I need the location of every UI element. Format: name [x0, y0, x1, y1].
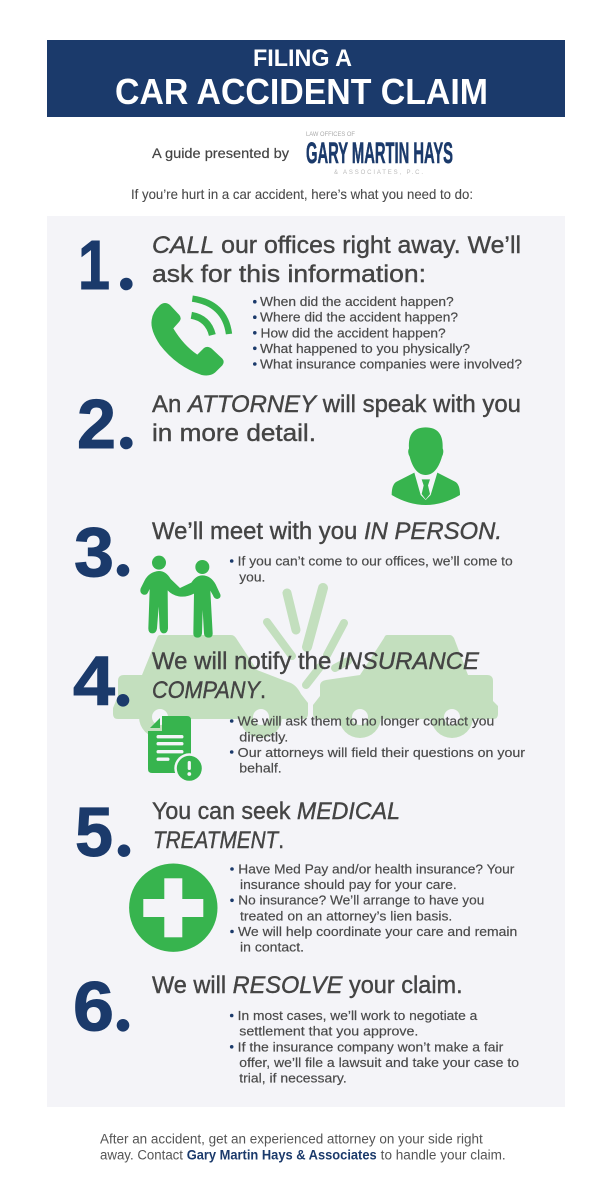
icon: medical cross [129, 864, 218, 952]
illustration: car crash watermark [113, 588, 498, 738]
footer call to action [100, 1131, 506, 1162]
text: GARY MARTIN HAYS [306, 137, 453, 170]
heading: resolve: We will RESOLVE your claim. [152, 972, 463, 999]
logo: Gary Martin Hays: & ASSOCIATES, P.C. [334, 170, 423, 176]
guide presented by line: A guide presented by [152, 145, 289, 161]
list: insurance: behalf. [239, 761, 282, 776]
list: insurance [230, 714, 526, 776]
footer call to action: to handle your claim. [381, 1147, 506, 1162]
list: insurance: directly. [239, 729, 288, 744]
list: medical: No insurance? We’ll arrange to have you [238, 893, 484, 908]
heading: attorney [152, 391, 521, 447]
footer call to action: away. Contact [100, 1147, 183, 1162]
heading: insurance company [152, 648, 480, 704]
list: insurance: Our attorneys will field their questions on your [238, 745, 526, 760]
logo: Gary Martin Hays [306, 131, 453, 176]
intro text: If you’re hurt in a car accident, here’s what you need to do: [131, 186, 473, 202]
step 4 [73, 642, 526, 783]
numeral 2: 2 [77, 385, 116, 463]
numeral 1: 1 [78, 226, 110, 304]
heading: call: CALL our offices right away. We’ll [152, 232, 521, 259]
step 6 [73, 968, 519, 1086]
step 2 [77, 385, 521, 505]
list: in person: you. [239, 569, 265, 584]
list: in person [230, 554, 513, 584]
list: questions: When did the accident happen? [260, 294, 454, 309]
icon: phone [151, 299, 229, 375]
list: questions [253, 294, 522, 372]
icon: document with alert [148, 716, 204, 783]
numeral 4 [73, 642, 129, 720]
list: resolve [230, 1008, 519, 1086]
icon: people shaking hands [140, 556, 221, 638]
list: resolve: If the insurance company won’t make a fair [238, 1039, 504, 1054]
list: questions: What insurance companies were involved? [260, 357, 522, 372]
heading: medical treatment: You can seek MEDICAL [152, 798, 400, 825]
footer call to action: After an accident, get an experienced attorney on your side right [100, 1131, 483, 1146]
numeral 3: 3 [74, 513, 114, 591]
heading: insurance company: COMPANY. [152, 677, 266, 704]
heading: insurance company: We will notify the INSURANCE [152, 648, 480, 675]
numeral 5: 5 [75, 793, 113, 871]
title banner [47, 40, 565, 117]
step 5 [75, 793, 517, 955]
heading: medical treatment [152, 798, 400, 854]
title banner: CAR ACCIDENT CLAIM [115, 71, 488, 112]
list: medical: treated on an attorney’s lien basis. [240, 908, 452, 923]
list: in person: If you can’t come to our offices, we’ll come to [238, 554, 513, 569]
heading: attorney: An ATTORNEY will speak with you [152, 391, 521, 418]
heading: medical treatment: TREATMENT. [153, 827, 284, 854]
logo: Gary Martin Hays: LAW OFFICES OF [306, 131, 355, 138]
numeral 6 [73, 968, 129, 1046]
step 3 [74, 513, 513, 638]
icon: attorney [392, 427, 460, 505]
heading: call [152, 232, 521, 288]
step 1 [78, 226, 522, 375]
list: medical: We will help coordinate your care and remain [238, 924, 517, 939]
heading: in person: We’ll meet with you IN PERSON. [152, 518, 502, 545]
list: medical: Have Med Pay and/or health insurance? Your [238, 861, 515, 876]
numeral 4: 4 [73, 642, 115, 720]
footer call to action: Gary Martin Hays & Associates [187, 1147, 377, 1162]
list: medical [230, 861, 517, 955]
heading: attorney: in more detail. [152, 420, 316, 447]
numeral 6: 6 [73, 968, 114, 1046]
list: medical: in contact. [240, 940, 304, 955]
list: insurance: We will ask them to no longer contact you [238, 714, 494, 729]
list: resolve: trial, if necessary. [239, 1071, 347, 1086]
list: questions: What happened to you physically? [260, 341, 470, 356]
heading: call: ask for this information: [152, 261, 426, 288]
list: medical: insurance should pay for your care. [240, 877, 457, 892]
list: questions: Where did the accident happen? [260, 310, 458, 325]
panel: steps background [47, 216, 565, 1107]
list: resolve: In most cases, we’ll work to negotiate a [238, 1008, 478, 1023]
title banner: FILING A [253, 45, 352, 72]
list: questions: How did the accident happen? [260, 325, 446, 340]
list: resolve: offer, we’ll file a lawsuit and take your case to [239, 1055, 519, 1070]
list: resolve: settlement that you approve. [239, 1024, 418, 1039]
